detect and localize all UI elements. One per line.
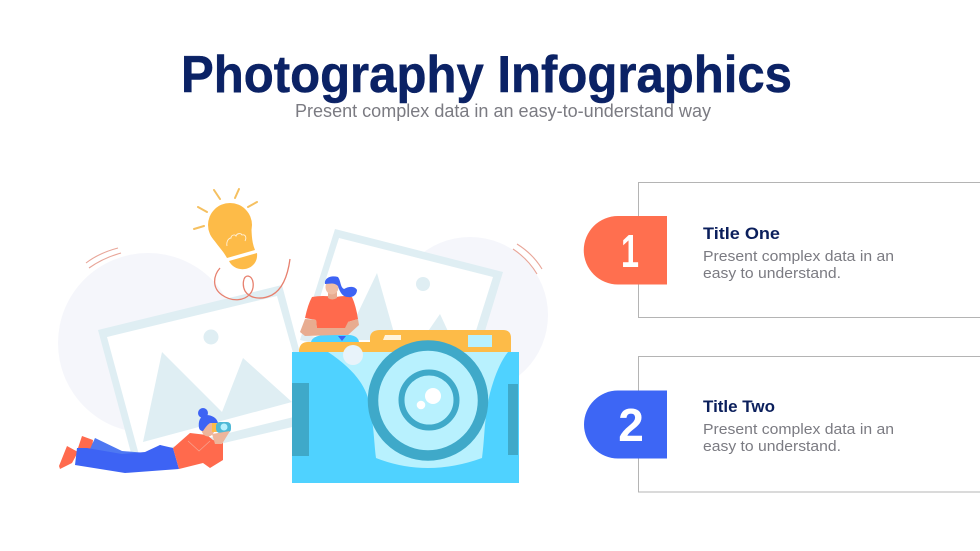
motion lines right: [513, 244, 542, 274]
sitting woman: [300, 276, 359, 342]
lying photographer: [59, 408, 231, 473]
subtitle: Present complex data in an easy-to-understand way: [295, 101, 711, 121]
background blob right: [392, 237, 548, 393]
motion lines left: [86, 248, 121, 268]
camera top: [299, 330, 511, 354]
photo frame right: [300, 229, 503, 380]
description two: easy to understand.: [703, 439, 841, 455]
title: Photography Infographics: [181, 46, 792, 104]
card two outline: [638, 356, 980, 492]
illustration: photography scene: [58, 189, 548, 483]
light bulb icon: [194, 189, 257, 269]
card one outline: [638, 182, 980, 318]
card two: [584, 356, 980, 492]
camera: [292, 330, 519, 483]
flash: [343, 345, 363, 365]
badge two: [584, 390, 667, 458]
number one: 1: [621, 225, 639, 277]
background blob left: [58, 253, 238, 433]
description one: Present complex data in an: [703, 249, 894, 265]
title one: Title One: [703, 224, 780, 243]
description two: Present complex data in an: [703, 422, 894, 438]
card one: [584, 182, 980, 318]
lens: [373, 346, 483, 456]
badge one: [584, 216, 667, 284]
photo frame left: [98, 285, 318, 464]
camera grips: [292, 383, 309, 456]
description one: easy to understand.: [703, 266, 841, 282]
title two: Title Two: [703, 397, 775, 416]
number two: 2: [618, 399, 644, 451]
wire of the bulb: [215, 259, 290, 300]
camera body: [292, 352, 519, 483]
camera front light panel: [328, 352, 508, 468]
